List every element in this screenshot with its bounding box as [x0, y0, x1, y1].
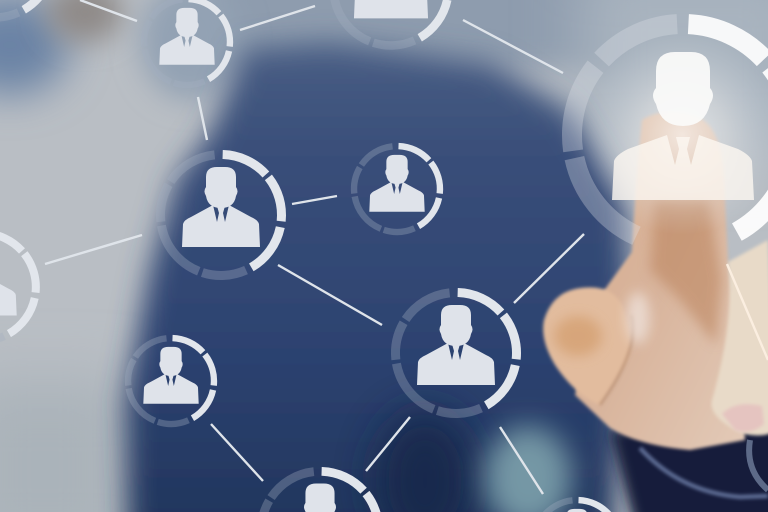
node: far left partial: [0, 211, 58, 363]
node: top centre partial: [310, 0, 472, 69]
connecting line over hand: [727, 264, 768, 360]
right finger: [711, 240, 768, 436]
blurred dark blue suit: [125, 42, 630, 512]
node: touched large icon: [526, 0, 768, 292]
palm and index finger: [575, 112, 745, 450]
node: top left partial: [0, 0, 76, 41]
hand pointing: [543, 112, 768, 450]
thumb crease: [600, 315, 633, 405]
thumb: [543, 287, 630, 405]
node: bottom centre partial: [238, 448, 402, 512]
thumb tip shade: [554, 316, 602, 356]
node: lower left small: [111, 321, 231, 441]
arc ring under the hand: [640, 448, 768, 497]
partial ring bottom right: [749, 440, 768, 490]
suit lower dark fold: [375, 410, 475, 512]
suit lower right highlight: [484, 426, 572, 512]
shadow beneath the hand: [610, 420, 768, 512]
glow around touched icon: [582, 35, 768, 235]
node: bottom right partial: [517, 483, 637, 512]
node: centre large: [371, 268, 541, 438]
node: top small: [127, 0, 247, 102]
knuckle highlight: [626, 292, 650, 344]
node: centre left large: [136, 130, 306, 300]
finger warm core: [650, 200, 722, 345]
connecting lines: [45, 0, 584, 494]
node: centre small: [337, 129, 457, 249]
right finger nail: [722, 404, 764, 432]
